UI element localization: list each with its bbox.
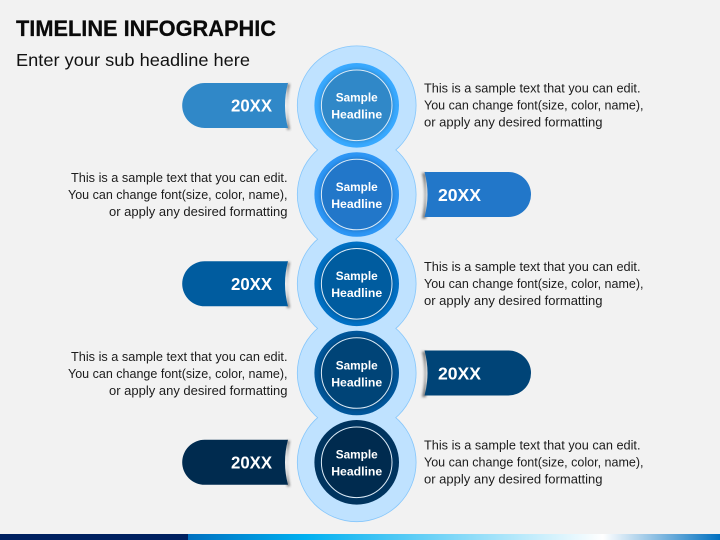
text block 3: You can change font(size, color, name), [424,276,644,291]
text block 4: This is a sample text that you can edit. [71,349,288,364]
date pill 3 [182,261,290,308]
date pill 4 [422,350,531,397]
text block 5: This is a sample text that you can edit. [424,438,640,453]
date pill 1 [182,83,290,130]
date pill 5: 20XX [231,453,272,473]
bottom bar [0,534,720,540]
milestone 2 node: Headline [331,197,382,211]
text block 4 [68,349,288,398]
text block 5 [424,438,644,487]
title: TIMELINE INFOGRAPHIC [16,16,276,41]
text block 2: This is a sample text that you can edit. [71,170,288,185]
milestone 1 node: Sample [336,91,378,105]
milestone 2 node: Sample [336,180,378,194]
text block 3 [424,259,644,308]
milestone 1 node [314,63,399,148]
date pill 4: 20XX [438,364,481,384]
milestone 4 node: Sample [336,358,378,372]
text block 5: You can change font(size, color, name), [424,455,644,470]
milestone 5 node: Sample [336,448,378,462]
milestone 4 node [314,331,399,415]
milestone 2 node [314,152,399,237]
text block 2: You can change font(size, color, name), [68,187,288,202]
milestone 5 node: Headline [331,465,382,479]
milestone 3 node: Headline [331,286,382,300]
timeline spine: overlapping light-blue circles [297,46,417,522]
date pill 2 [422,172,531,218]
milestone 1 node: Headline [331,108,382,122]
text block 4: You can change font(size, color, name), [68,366,288,381]
text block 5: or apply any desired formatting [424,472,602,487]
milestone 5 node [314,420,399,505]
milestone 3 node: Sample [336,269,378,283]
text block 1: This is a sample text that you can edit. [424,81,640,96]
date pill 5 [182,440,290,486]
text block 1 [424,81,644,130]
text block 2: or apply any desired formatting [109,204,288,219]
text block 4: or apply any desired formatting [109,383,288,398]
text block 3: This is a sample text that you can edit. [424,259,640,274]
sub headline: Enter your sub headline here [16,50,250,70]
date pill 1: 20XX [231,96,272,116]
date pill 2: 20XX [438,185,481,205]
date pill 3: 20XX [231,274,272,294]
text block 2 [68,170,288,219]
milestone 4 node: Headline [331,375,382,389]
text block 1: or apply any desired formatting [424,115,602,130]
text block 1: You can change font(size, color, name), [424,98,644,113]
milestone 3 node [314,241,399,326]
text block 3: or apply any desired formatting [424,293,602,308]
